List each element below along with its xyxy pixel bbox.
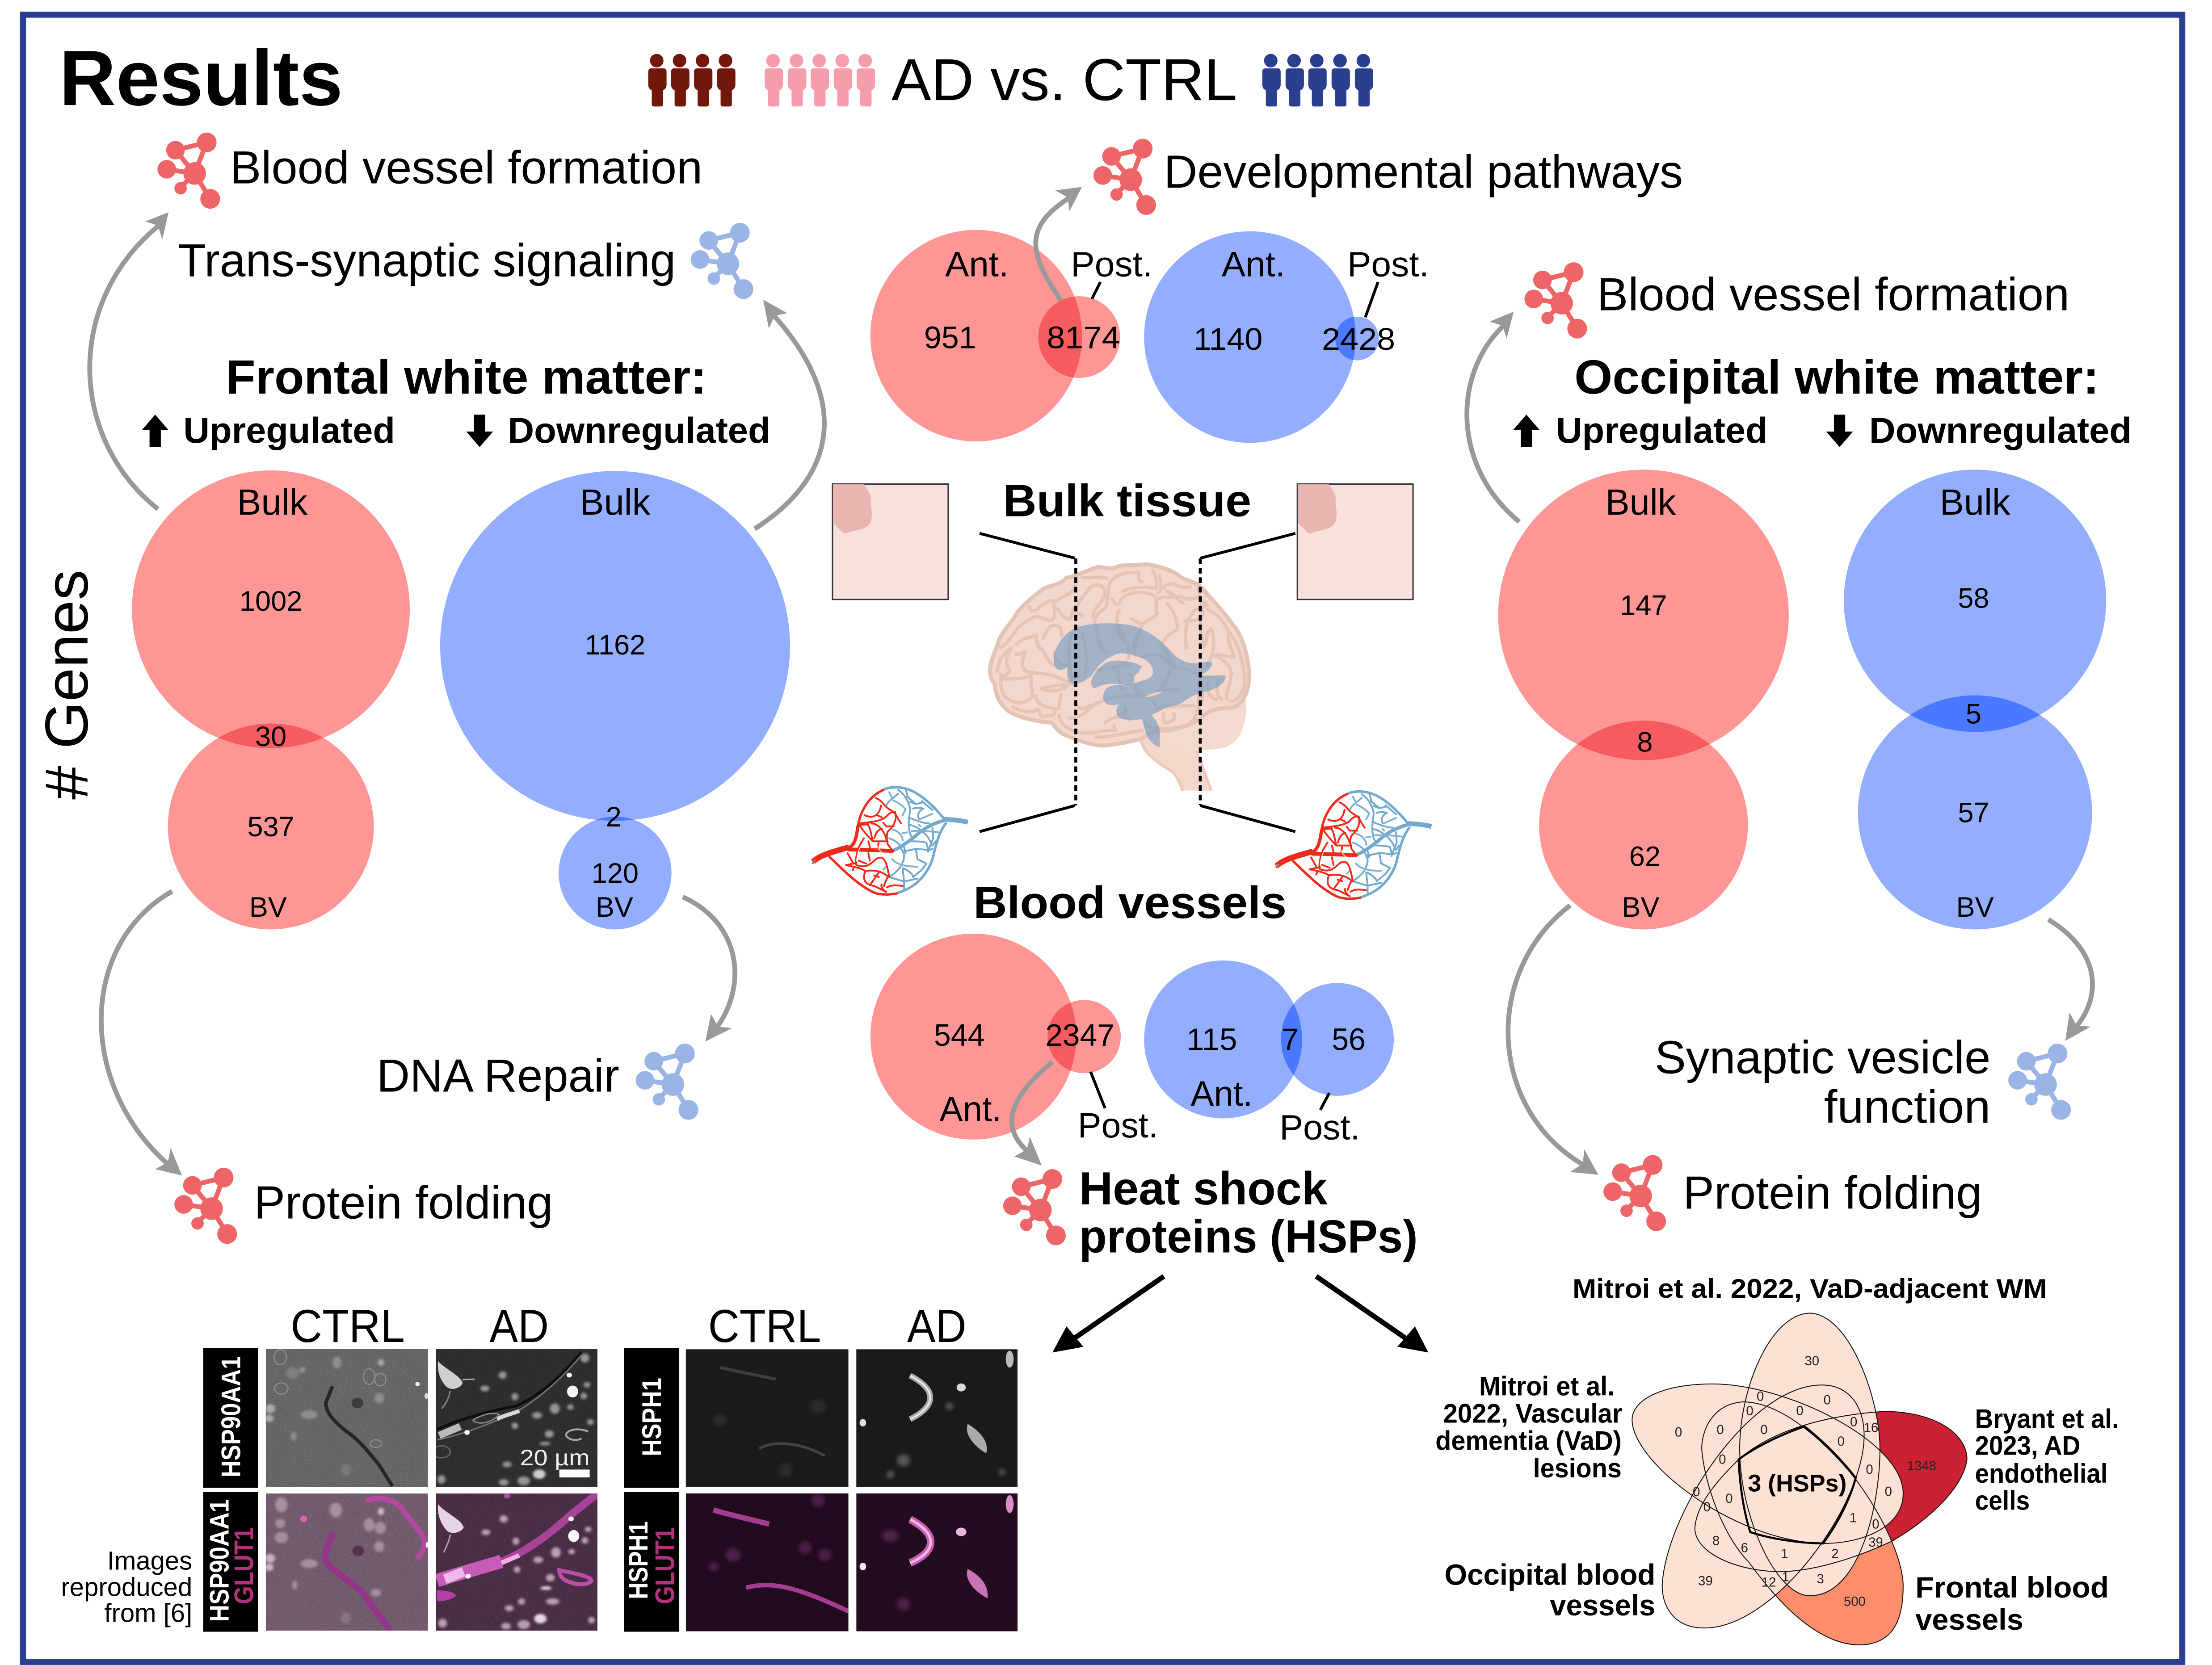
micrograph: HSP90AA1 GLUT1 CTRL [265,1493,429,1631]
label box: HSP90AA1 GLUT1: HSP90AA1 [204,1499,234,1622]
label: Downregulated: Downregulated [508,411,770,451]
venn: occipital upregulated: BV [1622,892,1660,923]
venn: bulk upregulated anterior vs posterior: Post. [1071,245,1152,284]
venn: region counts: 0 [1885,1484,1892,1499]
venn: frontal downregulated: 2 [606,801,622,833]
venn: centre label 3 HSPs: 3 (HSPs) [1748,1470,1846,1497]
column heading: CTRL: CTRL [708,1300,821,1352]
venn: frontal downregulated [440,471,790,929]
arrow: frontal BV down to DNA repair [683,897,735,1041]
venn label: Bryant endothelial cells: 2023, AD [1975,1430,2080,1460]
pathway: Trans-synaptic signaling: Trans-synaptic signaling [178,235,676,287]
venn: BV downregulated anterior vs posterior: Ant. [1190,1074,1253,1113]
venn: occipital downregulated [1844,470,2106,929]
micrograph: HSPH1 GLUT1 AD [856,1493,1018,1631]
note: images reproduced [61,1547,192,1627]
pathway: heat shock proteins: Heat shock [1079,1163,1328,1215]
micrograph: HSPH1 AD [856,1349,1018,1487]
venn: region counts: 0 [1866,1462,1873,1477]
pathway: Developmental pathways: Developmental pathways [1164,146,1683,198]
venn: region counts: 0 [1675,1425,1682,1440]
venn label: Occipital blood vessels: Occipital blood [1444,1559,1655,1592]
venn: BV upregulated anterior vs posterior: Ant. [939,1090,1001,1129]
micrograph: HSP90AA1 CTRL [265,1349,428,1487]
venn: region counts: 16 [1864,1420,1878,1435]
micrograph: HSP90AA1 GLUT1 AD [436,1493,598,1631]
brain sulci [997,571,1245,737]
arrow: occipital BV down to synaptic vesicle [2048,919,2093,1041]
label box: HSP90AA1 [203,1348,258,1488]
pathway: Synaptic vesicle function: function [1824,1081,1990,1133]
venn label: VaD lesions: dementia (VaD) [1435,1426,1622,1455]
pathway: Blood vessel formation: Blood vessel formation [230,142,702,193]
venn: occipital upregulated: Bulk [1606,482,1676,523]
venn: bulk upregulated anterior vs posterior: 951 [924,320,976,355]
arrow: overlap to developmental pathways [1036,187,1082,300]
venn: region counts: 0 [1725,1491,1733,1506]
micrograph: HSPH1 GLUT1 CTRL [686,1493,849,1631]
label: Upregulated: Upregulated [183,411,395,451]
venn: region counts: 0 [1757,1389,1764,1404]
venn: BV downregulated anterior vs posterior: 56 [1332,1022,1366,1057]
venn: bulk upregulated anterior vs posterior: Ant. [945,245,1009,284]
icon: bulk tissue square right [1297,484,1413,600]
venn: occipital upregulated: 147 [1620,590,1667,621]
venn label: Bryant endothelial cells: endothelial [1975,1459,2107,1489]
venn: region counts: 3 [1817,1572,1824,1586]
arrow: overlap to heat shock proteins [1012,1062,1052,1166]
venn: region counts: 1 [1850,1511,1857,1526]
venn: region counts: 39 [1868,1535,1883,1550]
scale bar: 20 um: 20 µm [520,1445,590,1470]
arrow: HSPs to venn [1316,1276,1428,1352]
pathway: Trans-synaptic signaling [178,223,753,299]
venn: region counts: 0 [1703,1500,1711,1514]
venn label: Occipital blood vessels: vessels [1550,1589,1655,1622]
label: Upregulated: Upregulated [1556,411,1768,451]
venn: BV upregulated anterior vs posterior [871,934,1158,1145]
pathway: Protein folding [174,1168,553,1244]
label box: HSPH1 GLUT1 [623,1492,680,1631]
venn: region counts: 0 [1838,1434,1845,1449]
venn: region counts: 0 [1716,1422,1724,1437]
cerebrum [990,564,1249,746]
header: AD vs. CTRL cohort [648,47,1373,113]
pathway: Blood vessel formation [1524,262,2069,339]
venn: region counts [1675,1354,1936,1609]
venn label: VaD lesions: Mitroi et al. [1479,1371,1615,1401]
icon: down arrow [1826,415,1853,447]
venn: frontal upregulated: 537 [247,811,294,843]
venn: region counts: 0 [1746,1404,1754,1418]
venn label: Bryant endothelial cells: Bryant et al. [1975,1404,2119,1434]
venn: frontal upregulated: 1002 [240,586,302,617]
pathway: Synaptic vesicle function [1655,1032,2071,1133]
venn: BV upregulated anterior vs posterior: 544 [934,1018,985,1053]
venn: region counts: 8 [1712,1533,1720,1548]
venn: region counts: 0 [1824,1392,1831,1407]
venn: region counts: 0 [1850,1415,1857,1430]
venn: occipital downregulated: 5 [1966,698,1981,730]
pathway: Protein folding: Protein folding [254,1177,553,1229]
venn label: VaD-adjacent WM: Mitroi et al. 2022, VaD-adjacent WM [1573,1274,2047,1304]
pathway: DNA Repair [377,1044,698,1120]
venn: occipital upregulated: 8 [1637,727,1653,758]
pathway: Blood vessel formation: Blood vessel formation [1597,269,2069,321]
venn: occipital downregulated: 58 [1958,583,1989,614]
panel: occipital white matter [1467,262,2132,1231]
venn: region counts: 0 [1760,1422,1768,1437]
micrograph: HSP90AA1 AD [433,1349,598,1487]
venn: occipital downregulated: 57 [1958,797,1989,828]
venn: BV upregulated anterior vs posterior: 2347 [1045,1018,1114,1053]
venn: region counts: 0 [1796,1404,1804,1418]
panel: centre bottom blood vessel venns [871,934,1418,1262]
venn: region counts: 6 [1741,1540,1748,1555]
heading: Bulk tissue: Bulk tissue [1003,476,1251,526]
venn: frontal upregulated: Bulk [237,482,308,523]
icon: down arrow [466,415,493,447]
arrow: occipital BV up to protein folding [1508,906,1598,1175]
venn: region counts: 1348 [1907,1459,1936,1473]
connector: left tissue and vessel lines [980,533,1076,832]
arrow: frontal BV up to protein folding [101,891,182,1175]
venn: frontal downregulated: 120 [592,858,639,889]
pathway: Blood vessel formation [157,133,702,209]
venn: region counts: 1 [1782,1569,1789,1584]
label box: HSP90AA1 GLUT1: GLUT1 [229,1527,259,1604]
label box: HSPH1 [624,1348,679,1488]
icon: AD severe group people [648,54,736,106]
venn: BV downregulated anterior vs posterior [1144,960,1394,1147]
arrow: occipital up to blood vessel formation [1467,312,1519,522]
venn: bulk downregulated anterior vs posterior: Ant. [1222,245,1285,284]
venn: frontal upregulated [132,470,410,929]
column heading: AD: AD [907,1300,966,1352]
pathway: heat shock proteins: proteins (HSPs) [1079,1211,1418,1262]
venn: bulk downregulated anterior vs posterior: Post. [1347,245,1429,284]
note: images reproduced: reproduced [61,1573,192,1602]
pathway: Synaptic vesicle function: Synaptic vesicle [1655,1032,1990,1083]
venn: bulk downregulated anterior vs posterior: 2428 [1322,322,1395,356]
brainstem [1140,732,1213,791]
micrograph: HSPH1 CTRL [686,1349,849,1487]
venn: frontal upregulated: 30 [255,721,286,752]
venn: BV downregulated anterior vs posterior: 7 [1282,1022,1299,1057]
venn label: VaD lesions: 2022, Vascular [1443,1399,1622,1429]
icon: bulk tissue square left [833,484,948,600]
axis label: # Genes: # Genes [33,570,101,800]
panel: centre top bulk tissue venns [871,139,1683,443]
venn label: Frontal blood vessels: vessels [1915,1603,2023,1636]
icon: up arrow [142,415,168,447]
venn: frontal downregulated: Bulk [580,482,651,523]
connector: right tissue and vessel lines [1200,533,1295,832]
venn: occipital downregulated: BV [1956,892,1994,923]
heading: AD vs. CTRL: AD vs. CTRL [892,47,1237,113]
pathway: Protein folding: Protein folding [1683,1167,1982,1219]
venn label: Bryant endothelial cells: cells [1975,1485,2030,1515]
venn: occipital upregulated: 62 [1629,841,1661,872]
icon: capillary bed right [1275,792,1431,899]
venn: bulk downregulated anterior vs posterior [1144,231,1429,443]
venn: bulk upregulated anterior vs posterior [871,230,1152,441]
ventricles [1054,623,1226,747]
venn: BV upregulated anterior vs posterior: Post. [1078,1106,1158,1145]
icon: AD mild group people [765,54,875,106]
venn: frontal downregulated: 1162 [585,629,645,661]
label: Downregulated: Downregulated [1869,411,2132,451]
title: Results: Results [59,34,343,122]
venn label: Occipital blood vessels [1444,1559,1655,1622]
pathway: Protein folding [1603,1155,1982,1231]
heading: Blood vessels: Blood vessels [973,878,1287,928]
pathway: DNA Repair: DNA Repair [377,1050,619,1102]
venn: region counts: 0 [1872,1517,1880,1531]
panel: immunofluorescence images [61,1300,1018,1631]
panel: frontal white matter [90,133,824,1244]
label box: HSPH1 GLUT1: HSPH1 [623,1521,653,1599]
arrow: frontal up to blood vessel formation [90,212,168,509]
venn label: VaD lesions [1435,1371,1622,1483]
pathway: Developmental pathways [1093,139,1683,215]
venn: region counts: 12 [1762,1575,1776,1590]
venn label: Frontal blood vessels: Frontal blood [1915,1571,2109,1604]
venn: BV downregulated anterior vs posterior: 115 [1186,1022,1237,1057]
cerebellum [1160,699,1246,750]
venn: region counts: 2 [1831,1546,1839,1561]
venn: occipital downregulated: Bulk [1940,482,2011,523]
venn: region counts: 0 [1719,1452,1726,1467]
venn: petals [1632,1313,1967,1645]
column heading: AD: AD [489,1300,549,1352]
note: images reproduced: from [6] [104,1598,192,1627]
label box: HSPH1 GLUT1: GLUT1 [650,1527,680,1604]
arrow: HSPs to images [1052,1276,1164,1352]
venn: region counts: 500 [1844,1594,1866,1609]
venn label: VaD lesions: lesions [1533,1453,1622,1483]
venn: occipital upregulated [1498,470,1789,929]
arrow: frontal down to trans-synaptic signaling [755,300,824,529]
venn: bulk upregulated anterior vs posterior: 8174 [1047,320,1120,355]
venn: frontal downregulated: BV [596,892,633,923]
venn: region counts: 1 [1781,1546,1788,1561]
venn: frontal upregulated: BV [249,892,287,923]
label box: HSP90AA1: HSP90AA1 [216,1356,246,1477]
icon: up arrow [1513,415,1540,447]
column heading: CTRL: CTRL [290,1300,405,1352]
venn label: Frontal blood vessels [1915,1571,2109,1636]
pathway: heat shock proteins [1003,1163,1418,1262]
heading: Occipital white matter: Occipital white matter: [1574,350,2099,404]
icon: capillary bed left [812,787,968,894]
panel: five-way venn diagram [1435,1274,2119,1645]
label box: HSPH1: HSPH1 [637,1378,667,1456]
venn label: Bryant endothelial cells [1975,1404,2119,1515]
venn: region counts: 39 [1698,1573,1713,1588]
venn: region counts: 30 [1804,1354,1819,1368]
label box: HSP90AA1 GLUT1 [203,1492,259,1631]
venn: central intersection outline [1739,1426,1856,1543]
heading: Frontal white matter: Frontal white matter: [226,350,707,404]
venn: bulk downregulated anterior vs posterior: 1140 [1194,322,1262,356]
note: images reproduced: Images [107,1547,192,1576]
icon: control group people [1262,54,1373,106]
illustration: brain [990,564,1249,791]
venn: region counts: 0 [1693,1485,1700,1499]
venn: BV downregulated anterior vs posterior: Post. [1279,1108,1360,1147]
